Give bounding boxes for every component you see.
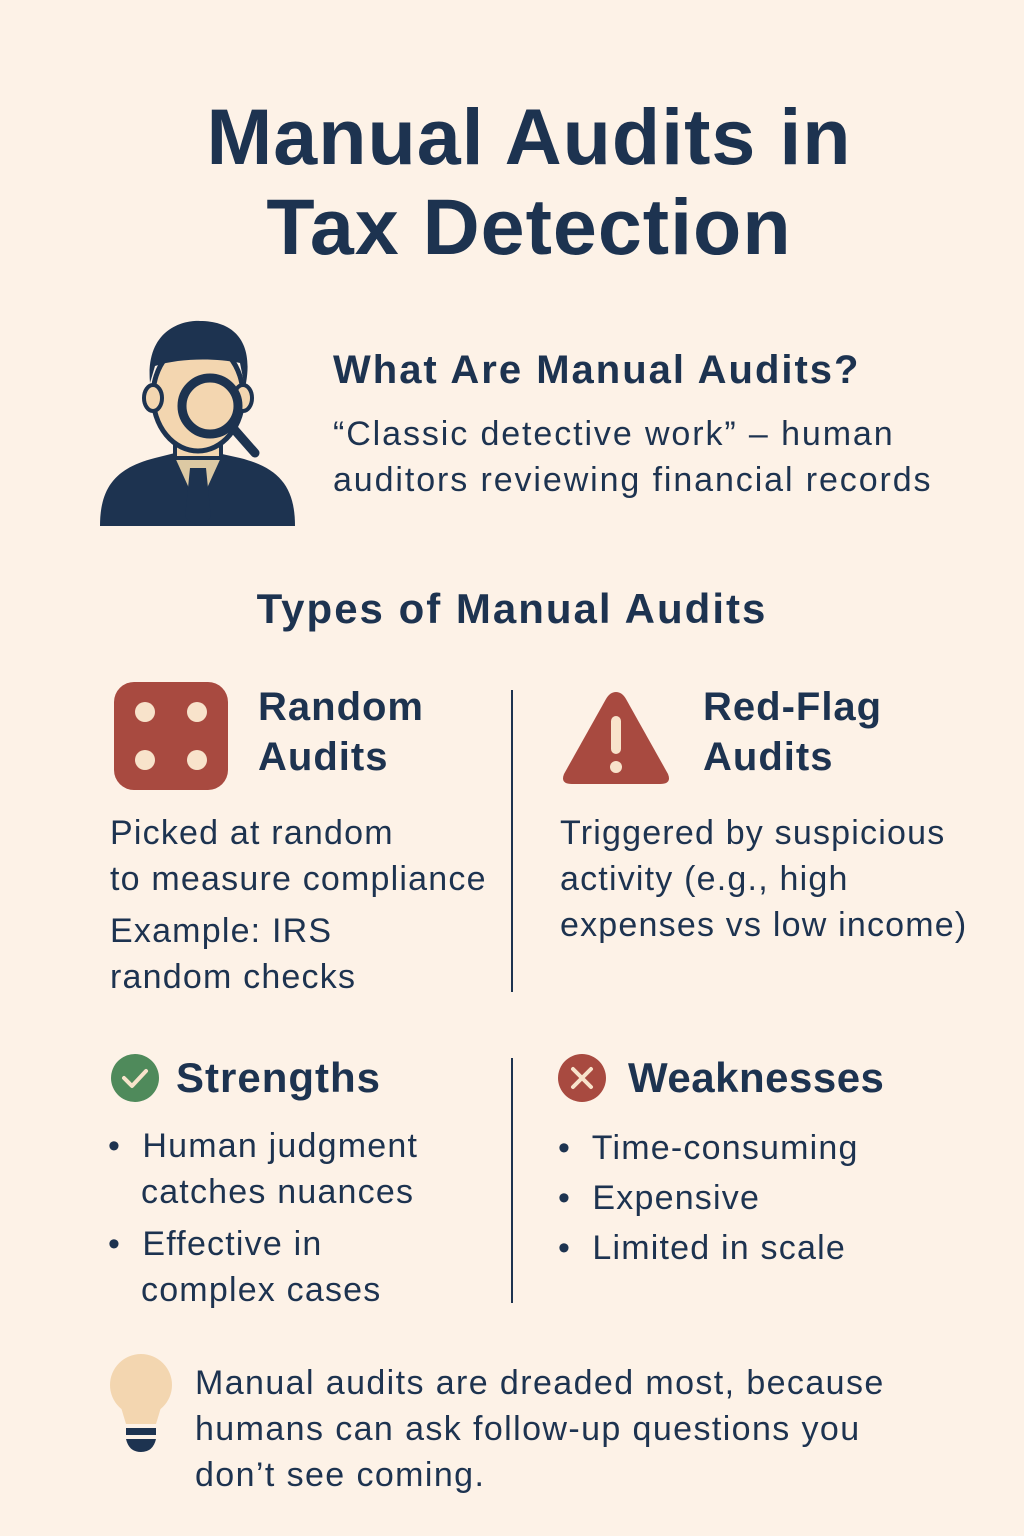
list: weaknesses: • Limited in scale bbox=[558, 1229, 846, 1267]
text: definition: auditors reviewing financial records bbox=[333, 461, 932, 499]
title bbox=[206, 92, 852, 271]
heading: red-flag audits: Audits bbox=[703, 735, 833, 779]
text: random audits bbox=[110, 814, 487, 898]
text: definition bbox=[333, 415, 932, 499]
heading: types: Types of Manual Audits bbox=[257, 585, 767, 632]
text: definition: “Classic detective work” – human bbox=[333, 415, 895, 453]
heading: red-flag audits: Red-Flag bbox=[703, 685, 882, 729]
text: red-flag: expenses vs low income) bbox=[560, 906, 967, 944]
list: weaknesses: • Expensive bbox=[558, 1179, 760, 1217]
list: strengths: • Effective in bbox=[108, 1225, 322, 1263]
text: random audits: to measure compliance bbox=[110, 860, 487, 898]
text: random audits: Picked at random bbox=[110, 814, 394, 852]
heading: strengths: Strengths bbox=[176, 1054, 381, 1101]
icon: check bbox=[111, 1054, 159, 1102]
callout text: humans can ask follow-up questions you bbox=[195, 1410, 861, 1448]
text: red-flag: Triggered by suspicious bbox=[560, 814, 945, 852]
heading: random audits: Audits bbox=[258, 735, 388, 779]
text: random example bbox=[110, 912, 356, 996]
title: Manual Audits in bbox=[206, 92, 852, 181]
list: weaknesses bbox=[558, 1129, 859, 1267]
icon: dice bbox=[114, 682, 228, 790]
callout text: don’t see coming. bbox=[195, 1456, 485, 1494]
heading: random audits: Random bbox=[258, 685, 424, 729]
text: red-flag bbox=[560, 814, 967, 944]
list: strengths: complex cases bbox=[141, 1271, 381, 1309]
icon: lightbulb bbox=[110, 1354, 172, 1452]
heading: weaknesses: Weaknesses bbox=[628, 1054, 884, 1101]
callout text: Manual audits are dreaded most, because bbox=[195, 1364, 885, 1402]
icon: warning bbox=[563, 692, 669, 784]
callout text bbox=[195, 1364, 885, 1494]
heading: red-flag audits bbox=[703, 685, 882, 779]
text: red-flag: activity (e.g., high bbox=[560, 860, 849, 898]
heading: what are manual audits: What Are Manual Audits? bbox=[333, 348, 860, 392]
list: strengths bbox=[108, 1127, 418, 1309]
text: random example: Example: IRS bbox=[110, 912, 332, 950]
list: strengths: catches nuances bbox=[141, 1173, 414, 1211]
title: Tax Detection bbox=[266, 182, 792, 271]
icon: auditor with magnifier bbox=[100, 320, 295, 526]
heading: random audits bbox=[258, 685, 424, 779]
text: random example: random checks bbox=[110, 958, 356, 996]
icon: x bbox=[558, 1054, 606, 1102]
list: strengths: • Human judgment bbox=[108, 1127, 418, 1165]
list: weaknesses: • Time-consuming bbox=[558, 1129, 859, 1167]
